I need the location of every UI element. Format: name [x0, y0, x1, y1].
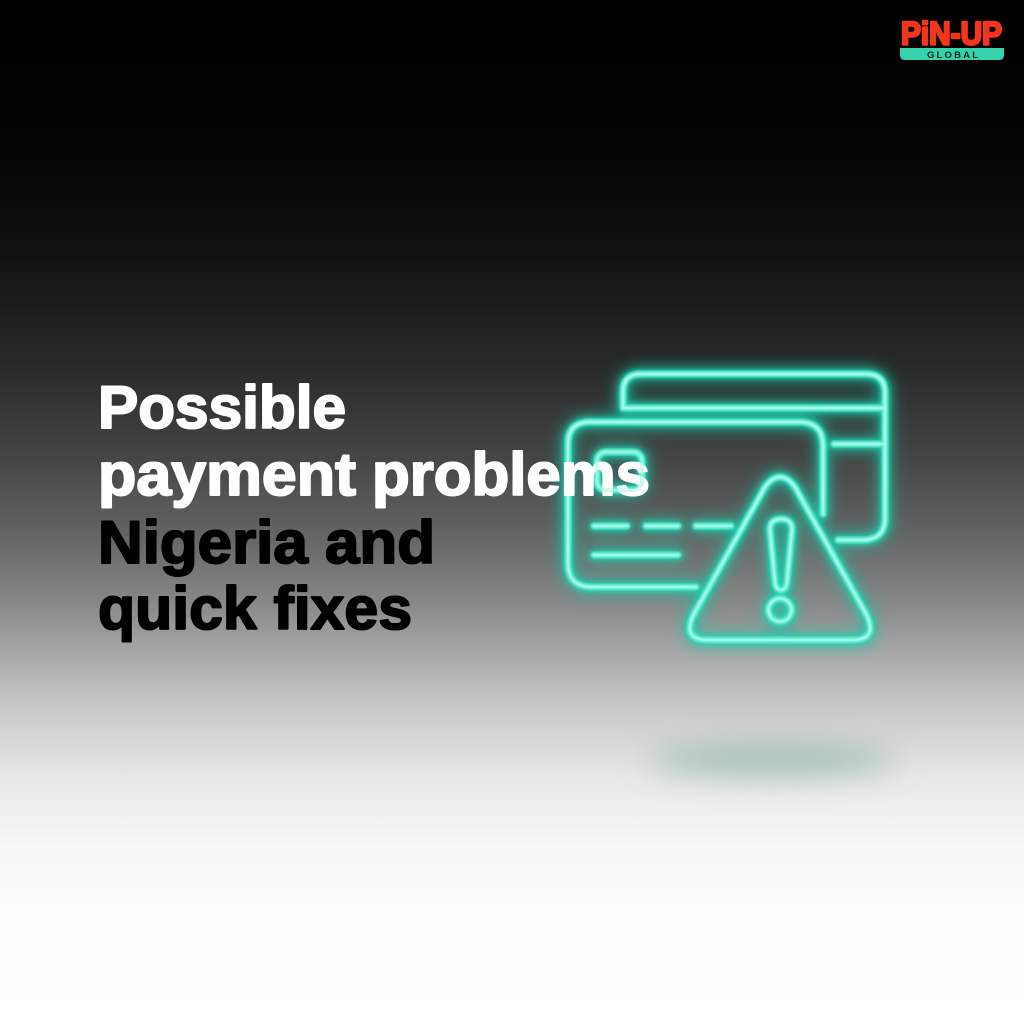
logo teal bar [900, 48, 1004, 60]
title text [98, 374, 650, 642]
logo wordmark: PiN-UP [901, 16, 1002, 52]
icon: chip outline showing faintly through text [597, 452, 642, 490]
title line: Possible: Possible [98, 374, 346, 441]
logo: PIN-UP Global [900, 16, 1004, 61]
title line: payment: payment [98, 441, 356, 508]
title line: quick fixes: quick fixes [98, 575, 412, 642]
logo subtitle: GLOBAL [927, 50, 978, 61]
title line: Nigeria and: Nigeria and [98, 509, 435, 576]
icon: neon bank cards with warning triangle [568, 374, 885, 640]
title line: problems: problems [372, 441, 650, 508]
floating icon shadow [647, 745, 897, 775]
